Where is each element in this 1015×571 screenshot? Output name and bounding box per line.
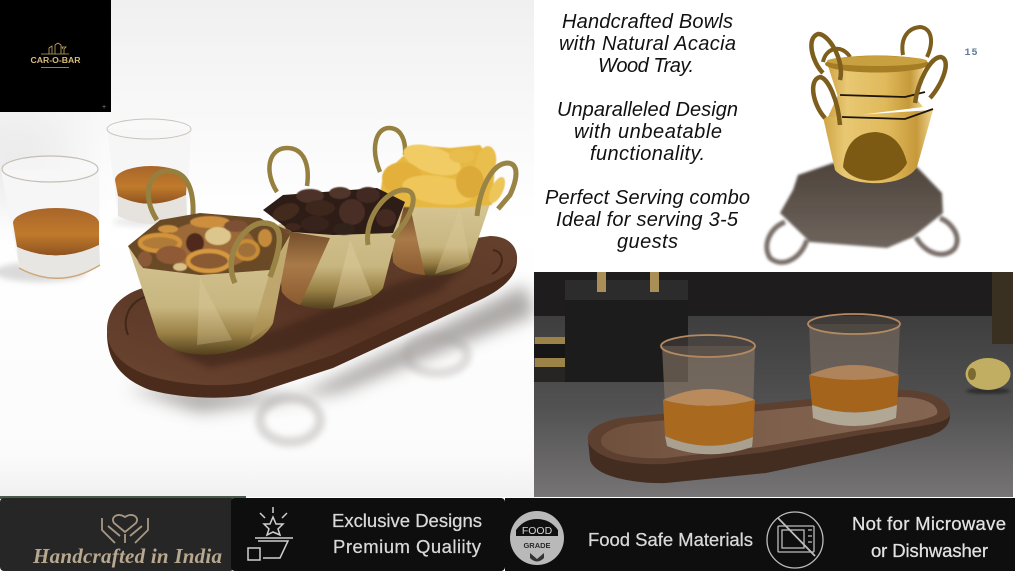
snack mix: [138, 216, 272, 271]
panel: not for microwave: [755, 498, 1015, 571]
bowl front handles: [811, 34, 946, 125]
panel: stacked gold bowls photo: [762, 0, 1015, 271]
panel: whisky glasses on tray photo: [534, 272, 1013, 497]
olive: [966, 358, 1010, 394]
bowl back handles: [823, 27, 931, 62]
text block: product description: with Natural Acacia: [559, 33, 736, 55]
text block: product description: [534, 0, 762, 272]
text block: product description: Perfect Serving combo: [545, 187, 750, 209]
label: Food Safe Materials: [588, 529, 753, 550]
text block: product description: with unbeatable: [574, 121, 722, 143]
text block: product description: Handcrafted Bowls: [562, 11, 733, 33]
text block: product description: functionality.: [590, 143, 705, 165]
logo: CAR-O-BAR: +: [102, 104, 106, 111]
bowl shadow: [767, 163, 957, 262]
front handle: [231, 223, 279, 283]
label: Exclusive Designs: [332, 510, 482, 531]
tagline: Handcrafted in India: [32, 544, 222, 568]
label: Not for Microwave: [852, 513, 1006, 534]
logo bottles icon: [41, 43, 69, 54]
page number: 15: [964, 48, 978, 59]
icon: food grade badge: GRADE: [523, 541, 551, 550]
icon: heart in hands: [102, 515, 148, 543]
back whisky glass: [107, 119, 191, 227]
front handle: [368, 190, 413, 245]
front handle: [477, 163, 516, 216]
crisps: [380, 138, 508, 209]
icon: crossed microwave: [767, 512, 823, 568]
text block: product description: Wood Tray.: [598, 55, 694, 77]
stacked bowl body: [823, 56, 933, 183]
text block: product description: Unparalleled Design: [557, 99, 738, 121]
bowl: chocolate biscuits: [263, 148, 413, 309]
panel: main product photo: [0, 0, 535, 497]
wooden tray: [107, 236, 517, 398]
biscuits: [270, 187, 396, 235]
back handle: [375, 128, 405, 172]
bowl: crisps: [375, 128, 516, 276]
icon: food grade badge: FOOD: [522, 525, 553, 537]
panel: handcrafted in India badge: [0, 496, 246, 571]
right whisky glass: [808, 314, 900, 426]
front whisky glass: [0, 156, 100, 282]
icon: food grade badge: [510, 511, 564, 565]
black block and brass props: [534, 272, 1013, 382]
label: [852, 513, 1006, 561]
panel: food safe materials: [505, 498, 755, 571]
text block: product description: guests: [617, 231, 678, 253]
logo: CAR-O-BAR: CAR-O-BAR: [30, 56, 81, 65]
text block: product description: Ideal for serving 3-5: [556, 209, 739, 231]
label: Premium Qualiity: [333, 536, 482, 557]
bowl: pretzels and nuts: [128, 171, 290, 355]
panel: exclusive designs: [231, 498, 505, 571]
tray shadow: [125, 285, 535, 442]
label: [332, 510, 482, 557]
logo: CAR-O-BAR: [0, 0, 111, 112]
label: or Dishwasher: [871, 540, 988, 561]
wood tray: [588, 390, 950, 483]
left whisky glass: [661, 335, 755, 454]
icon: star on tray: [248, 507, 293, 560]
